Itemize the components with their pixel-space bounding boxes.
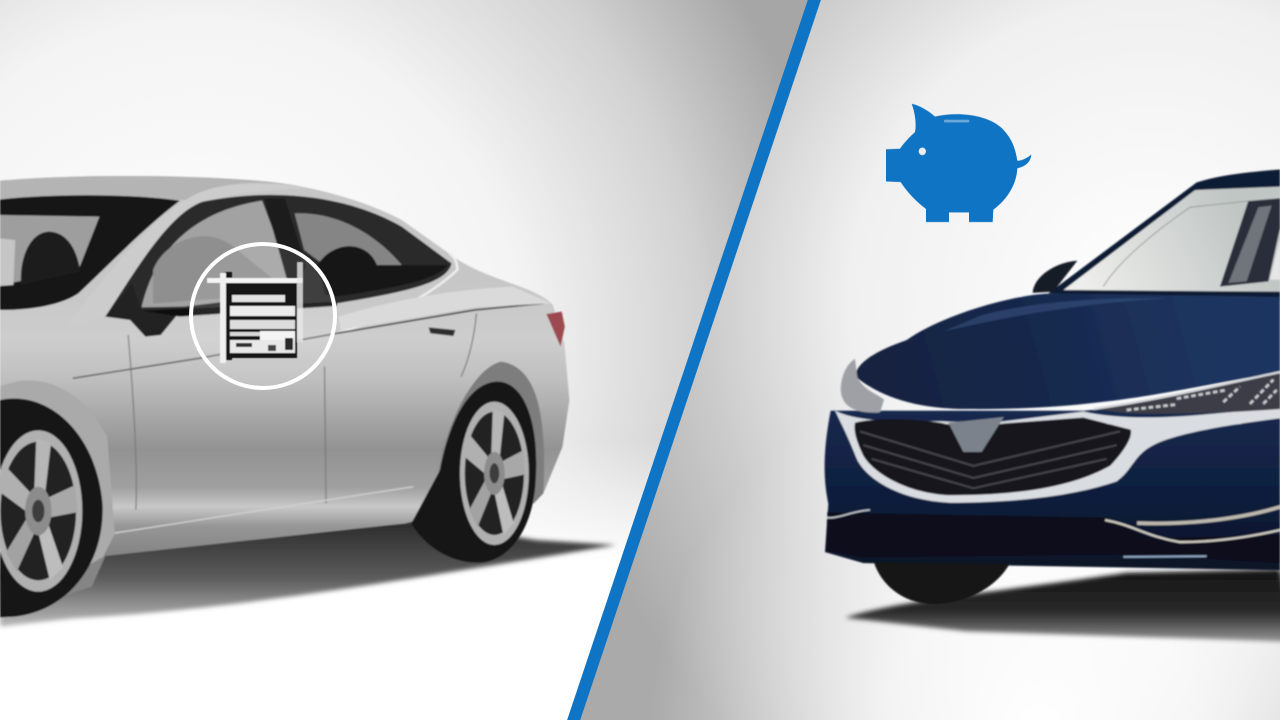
navy car front view — [825, 169, 1280, 642]
grille — [855, 418, 1131, 495]
silver car side windows — [105, 195, 452, 337]
right headlight — [1093, 372, 1280, 414]
front wheel arch — [0, 380, 115, 617]
left headlight — [841, 359, 884, 413]
ground shadow under navy car — [845, 569, 1280, 642]
navy car roof frame — [1048, 169, 1280, 300]
emblem — [948, 417, 1004, 452]
front wheel — [0, 398, 103, 617]
divider line — [573, 0, 815, 720]
navy car hood — [855, 293, 1280, 409]
silver car shoulder line — [73, 287, 551, 533]
panel: left background — [0, 0, 815, 720]
rear wheel — [411, 382, 536, 563]
silver car side view — [0, 176, 616, 627]
chrome grille surround — [835, 407, 1280, 503]
silver car body — [0, 176, 569, 617]
callout: circle with document icon — [191, 244, 335, 388]
navy car front fascia — [825, 393, 1280, 570]
silver car windshield — [0, 195, 180, 310]
silver car door handle — [429, 327, 455, 336]
silver car roof — [0, 176, 310, 200]
navy car mirror — [1033, 261, 1077, 293]
lower bumper — [826, 507, 1280, 563]
document icon — [207, 262, 303, 363]
silver car A pillar — [63, 183, 310, 330]
icon: piggy bank — [886, 104, 1031, 222]
silver car tail light — [546, 312, 565, 347]
ground shadow under silver car — [0, 520, 616, 627]
navy car windshield — [1063, 187, 1280, 292]
panel: right background — [573, 0, 1280, 720]
navy car front tyre — [874, 562, 1009, 604]
silver car window trim — [337, 253, 457, 333]
hood highlight — [943, 298, 1167, 331]
rear wheel arch — [434, 362, 544, 520]
